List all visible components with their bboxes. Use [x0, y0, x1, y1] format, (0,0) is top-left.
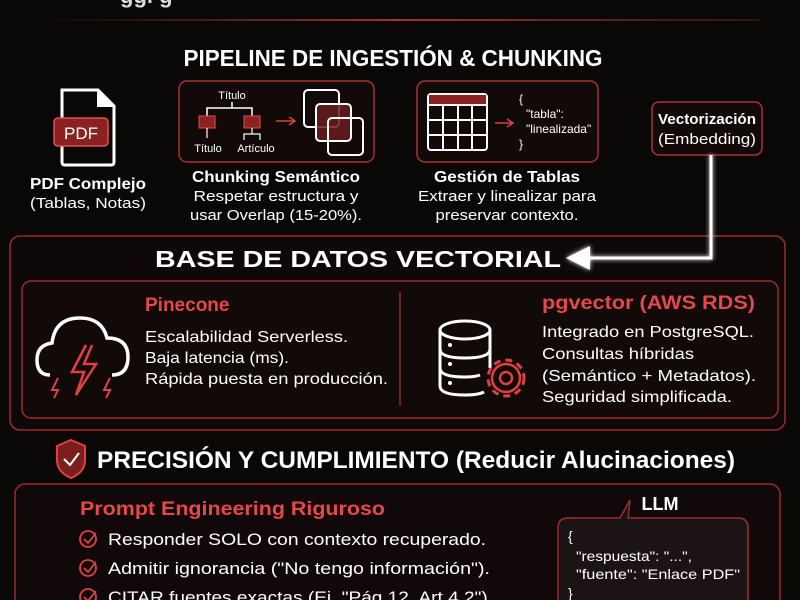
heading: precision y cumplimiento: PRECISIÓN Y CUMPLIMIENTO (Reducir Alucinaciones) [97, 446, 735, 474]
panel: vectorizacion: Vectorización [658, 111, 756, 128]
icon: cloud lightning [37, 318, 128, 398]
text: pinecone [145, 295, 388, 388]
label: PDF Complejo: (Tablas, Notas) [30, 195, 146, 212]
label: gestion de tablas: preservar contexto. [436, 207, 578, 224]
checklist [80, 530, 493, 600]
inner panel: db options [22, 281, 778, 418]
callout: llm json [558, 500, 748, 600]
text: pgvector: (Semántico + Metadatos). [542, 368, 756, 385]
icon: shield check [57, 440, 85, 478]
panel: chunking semantico: Título [218, 90, 246, 102]
label: gestion de tablas: Gestión de Tablas [434, 169, 580, 186]
checklist: Admitir ignorancia ("No tengo información"). [108, 559, 490, 578]
panel: vectorizacion: (Embedding) [658, 131, 756, 148]
label: PDF Complejo [30, 176, 146, 212]
callout: llm json: "respuesta": "...", [576, 548, 692, 564]
label: chunking semantico [190, 169, 362, 224]
label: chunking semantico: usar Overlap (15-20%). [190, 207, 362, 224]
text: pinecone: Baja latencia (ms). [145, 350, 289, 367]
heading: base de datos vectorial: BASE DE DATOS VECTORIAL [155, 246, 561, 272]
text: pinecone: Escalabilidad Serverless. [145, 329, 348, 346]
text: pgvector: Integrado en PostgreSQL. [542, 324, 754, 341]
panel: gestion de tablas: "tabla": [526, 107, 564, 121]
panel: chunking semantico [179, 81, 374, 162]
label: LLM: LLM [642, 494, 678, 514]
panel: chunking semantico: Artículo [237, 143, 275, 155]
arrow: chunking to tablas [377, 126, 406, 130]
panel: prompt engineering: Prompt Engineering Riguroso [80, 499, 385, 520]
panel: gestion de tablas: } [519, 137, 523, 151]
icon: database gear [440, 321, 524, 396]
text: pgvector: Seguridad simplificada. [542, 389, 732, 406]
text: pinecone: Pinecone [145, 295, 229, 316]
text: pgvector: Consultas híbridas [542, 346, 694, 363]
panel: vectorizacion [652, 102, 762, 155]
heading: pipeline: PIPELINE DE INGESTIÓN & CHUNKING [184, 44, 602, 71]
callout: llm json: { [568, 528, 573, 544]
label: chunking semantico: Chunking Semántico [192, 169, 360, 186]
icon: PDF document: PDF [64, 124, 98, 143]
panel: gestion de tablas: { [519, 92, 523, 106]
panel: prompt engineering [15, 484, 780, 600]
text: pgvector [542, 293, 756, 406]
panel: gestion de tablas: "linealizada" [526, 122, 591, 136]
text: pgvector: pgvector (AWS RDS) [542, 293, 755, 314]
label: chunking semantico: Respetar estructura y [194, 188, 359, 205]
callout: llm json: "fuente": "Enlace PDF" [576, 566, 740, 582]
label: gestion de tablas: Extraer y linealizar para [418, 188, 597, 205]
panel: chunking semantico: Título [194, 143, 222, 155]
label: gestion de tablas [418, 169, 597, 224]
arrow: vectorizacion to base de datos [572, 155, 711, 258]
arrow: PDF to chunking [118, 126, 168, 130]
arrow: tablas to vectorizacion [601, 126, 642, 130]
checklist: Responder SOLO con contexto recuperado. [108, 530, 486, 549]
panel: gestion de tablas [417, 81, 598, 162]
label: PDF Complejo: PDF Complejo [30, 176, 146, 193]
panel: base de datos vectorial [10, 236, 785, 430]
text: pinecone: Rápida puesta en producción. [145, 371, 388, 388]
icon: PDF document [54, 90, 114, 165]
